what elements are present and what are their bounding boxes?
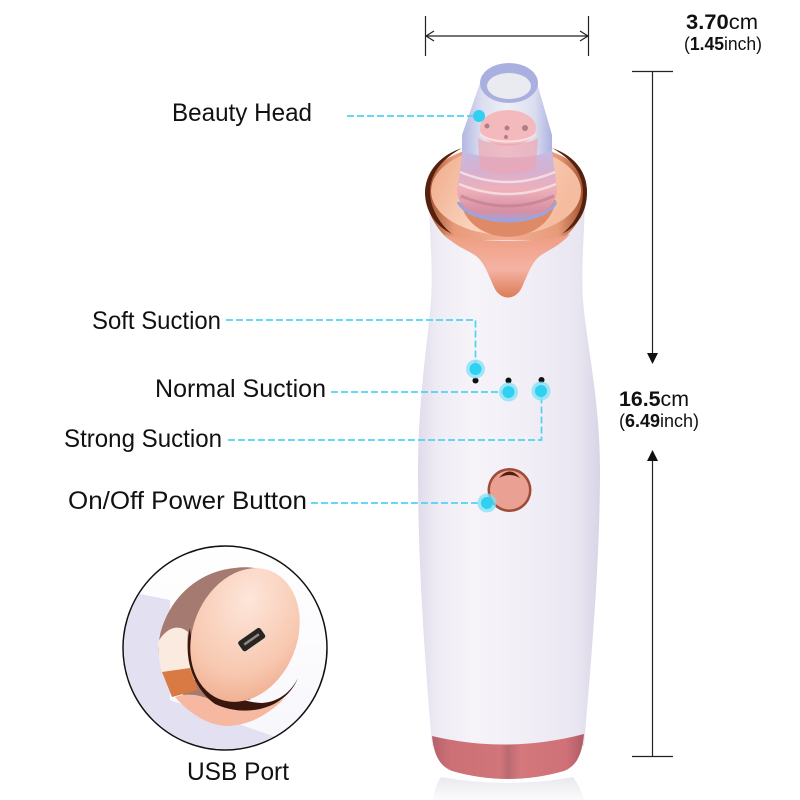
dome marks <box>484 124 528 139</box>
base reflection <box>433 777 584 800</box>
indicator lights <box>472 377 544 384</box>
width label: (1.45inch) <box>684 34 762 54</box>
collar top face <box>431 147 581 235</box>
inner neck <box>478 138 538 174</box>
cap rim <box>458 202 556 221</box>
callout: On/Off Power Button: On/Off Power Button <box>68 487 307 515</box>
collar drop <box>444 234 570 298</box>
height dimension: lower arrow <box>632 450 673 756</box>
USB face <box>171 552 319 718</box>
height label <box>619 388 699 431</box>
callout: On/Off Power Button <box>68 487 496 515</box>
orange reflection <box>162 668 198 697</box>
cap shadow on collar <box>460 200 556 237</box>
callout: Soft Suction <box>92 307 485 378</box>
USB socket <box>237 626 267 653</box>
callout: Normal Suction <box>155 375 518 403</box>
caption: USB Port: USB Port <box>187 758 289 786</box>
height dimension: upper arrow <box>632 72 673 364</box>
callout: Soft Suction: Soft Suction <box>92 307 221 335</box>
callout: Normal Suction: Normal Suction <box>155 375 326 403</box>
pale band <box>158 628 195 680</box>
plug lower rim <box>175 695 285 726</box>
beauty head lower cap <box>457 150 557 222</box>
plug side reflection <box>158 567 256 700</box>
device: blackhead suction tool <box>418 63 600 800</box>
callout: Strong Suction: Strong Suction <box>64 425 222 453</box>
power button <box>488 468 532 512</box>
width dimension: top arrow <box>426 16 588 56</box>
inset ring <box>123 546 327 750</box>
callout: Beauty Head: Beauty Head <box>172 99 312 127</box>
neck rings <box>480 134 536 142</box>
width label <box>684 11 762 54</box>
callout: Beauty Head <box>172 99 485 127</box>
collar dark edge <box>425 148 587 234</box>
inset background <box>123 546 327 750</box>
rose gold collar <box>425 145 587 240</box>
cap ridges <box>459 172 556 194</box>
inset: USB port close-up <box>120 546 327 760</box>
width label: 3.70cm <box>686 11 758 34</box>
callout: Strong Suction <box>64 382 550 453</box>
tip mouth <box>480 63 538 103</box>
device body <box>418 200 600 746</box>
device base <box>432 734 584 779</box>
cap fine ribs <box>461 196 554 206</box>
dark reflection <box>188 628 298 711</box>
height label: 16.5cm <box>619 388 689 411</box>
tip opening <box>487 73 531 99</box>
pink dome <box>480 110 536 146</box>
lavender handle strip <box>124 594 274 749</box>
beauty head tip <box>462 83 552 158</box>
height label: (6.49inch) <box>619 411 699 431</box>
